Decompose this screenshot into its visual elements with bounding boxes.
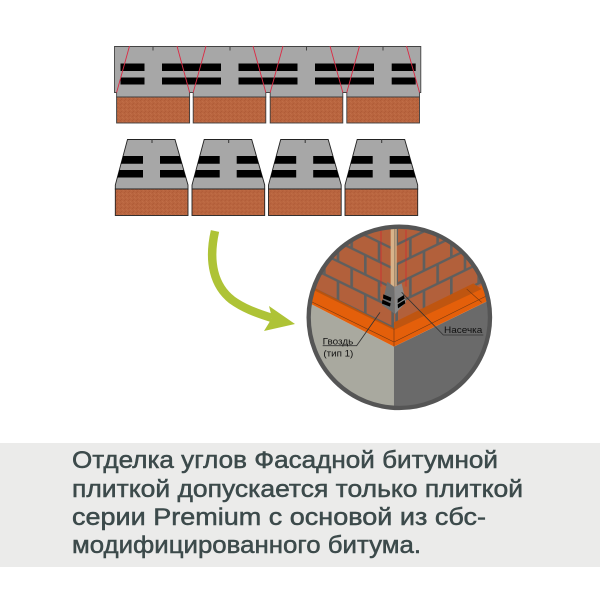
red cut lines [117,46,419,92]
cut shingle 3 [268,140,341,216]
light grey left facade [310,304,394,406]
black adhesive bars [120,64,416,84]
cut shingle 1 [115,140,188,216]
bottom row: cut trapezoid shingles [115,140,418,216]
text band background [0,443,600,567]
base strip shadow right [394,283,482,330]
red cut lines [381,230,406,287]
grey shingle strip [114,46,421,97]
leader line: nail [323,312,380,346]
label: nail type: (тип 1) [323,349,353,359]
corner shingle piece [382,282,406,314]
detail circle: corner of brick wall [306,224,492,410]
caption text: серии Premium с основой из сбс- [72,504,486,531]
caption text: плиткой допускается только плиткой [72,476,523,503]
label: nail: Гвоздь [323,336,354,346]
arrow: green curved arrow to detail circle [212,231,295,331]
top notches [153,46,383,50]
darker top of base strip [315,288,394,330]
cut shingle 4 [345,140,418,216]
label: notch: Насечка [444,325,482,335]
corner strip [391,225,397,287]
right brick wall [394,228,482,322]
cut shingle 2 [192,140,265,216]
dark grey right facade [394,302,488,406]
leader line: notch [402,292,483,335]
brick-coloured shingle tabs [117,97,419,123]
corner strip edge [394,229,396,287]
caption text: Отделка углов Фасадной битумной [72,447,498,474]
base strip fold lines [310,289,488,347]
top row: uncut shingle strip [114,46,421,123]
circle contents [310,228,488,406]
circle border [309,227,490,408]
left brick wall [315,229,394,328]
caption text: модифицированного битума. [72,532,421,559]
orange base strip [312,286,486,347]
caption text [72,447,523,559]
